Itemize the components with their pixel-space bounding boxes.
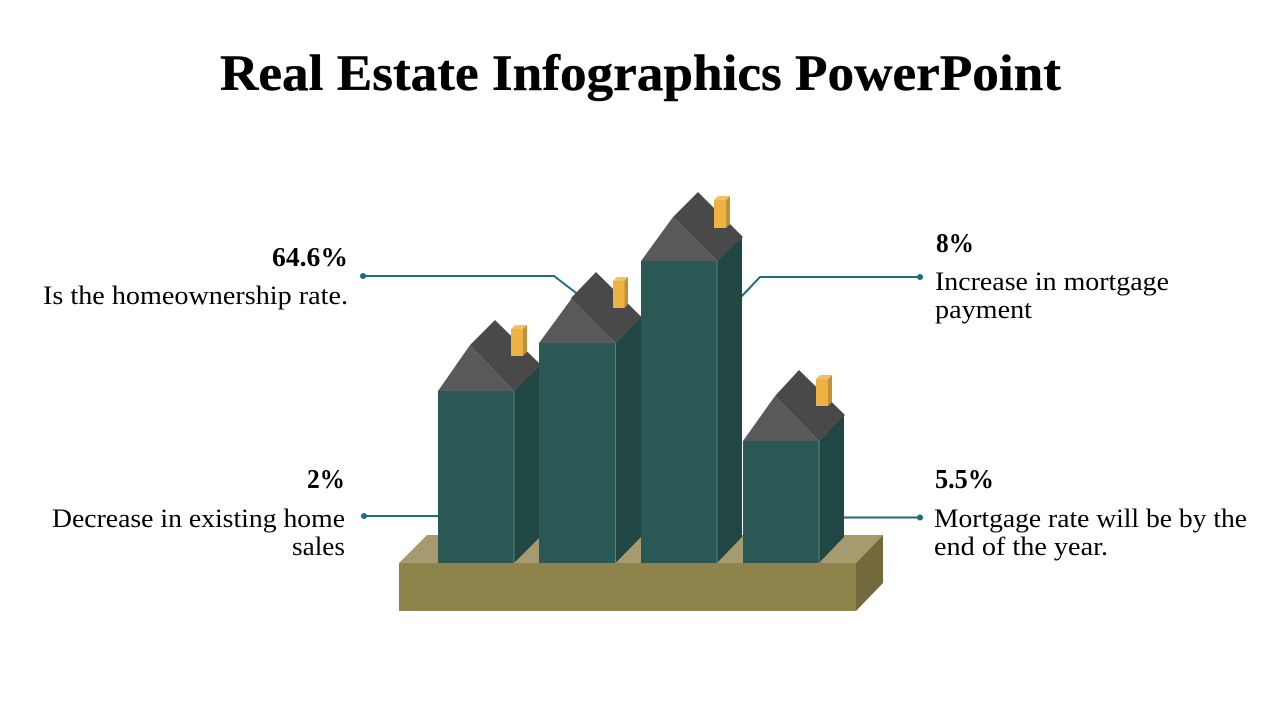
- text block: 5.5%: Mortgage rate will be by the: [934, 504, 1247, 533]
- base platform: [399, 535, 883, 611]
- text block: 8%: payment: [935, 295, 1033, 324]
- connector: bottom left: [361, 513, 440, 519]
- house 4: [743, 370, 845, 563]
- house 2: [539, 272, 642, 563]
- house 1: [438, 320, 541, 563]
- text block: 64.6%: [43, 242, 348, 310]
- connector: bottom right: [842, 514, 923, 520]
- text block: 2%: 2%: [307, 464, 345, 494]
- text block: 64.6%: Is the homeownership rate.: [43, 281, 348, 310]
- connector: top right: [740, 274, 923, 298]
- chimney 3: [714, 196, 730, 228]
- text block: 8%: [935, 228, 1169, 324]
- text block: 64.6%: 64.6%: [272, 242, 348, 272]
- text block: 2%: [52, 464, 345, 561]
- text block: 5.5%: end of the year.: [934, 532, 1108, 561]
- text block: 8%: 8%: [936, 228, 974, 258]
- text block: 5.5%: [934, 464, 1247, 561]
- chimney 1: [511, 325, 527, 356]
- title: Real Estate Infographics PowerPoint: [220, 46, 1061, 102]
- chimney 4: [816, 375, 832, 406]
- text block: 2%: Decrease in existing home: [52, 504, 345, 533]
- house 3: [641, 192, 743, 563]
- text block: 5.5%: 5.5%: [935, 464, 994, 494]
- text block: 8%: Increase in mortgage: [935, 267, 1169, 296]
- chimney 2: [613, 277, 628, 308]
- text block: 2%: sales: [292, 532, 345, 561]
- connector: top left: [360, 273, 580, 296]
